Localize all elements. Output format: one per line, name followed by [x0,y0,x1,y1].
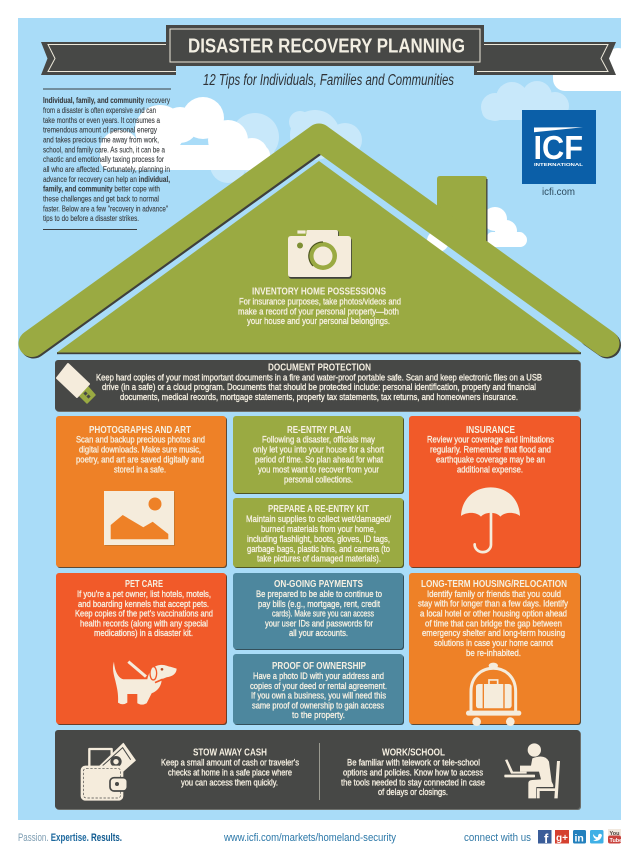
intro text: from a disaster is often expensive and can [43,105,156,115]
panel: pet care: If you're a pet owner, list hotels, motels, [77,589,211,599]
title banner [41,25,616,75]
panel: prepare a re-entry kit: PREPARE A RE-ENTRY KIT [268,504,369,515]
intro text [43,88,171,230]
panel: pet care: PET CARE [125,579,163,590]
title: DISASTER RECOVERY PLANNING [188,36,465,58]
clouds [100,48,633,252]
panel: document protection [55,360,581,412]
roof [32,137,608,345]
panel: re-entry plan: you most want to recover from your [258,464,379,474]
panel: re-entry plan: period of time. So plan ahead for what [255,454,383,464]
panel: pet care: Keep copies of the pet's vaccinations and [75,609,213,619]
ICF logo [522,110,596,198]
icon: luggage cart [466,663,521,726]
intro text: Individual, family, and community recovery [43,95,171,105]
panel: on-going payments: your user IDs and passwords for [265,618,373,628]
panel: prepare a re-entry kit [233,498,404,568]
panel: on-going payments: ON-GOING PAYMENTS [274,579,363,590]
panel: insurance: additional expense. [457,464,523,474]
panel: document protection: drive (in a safe) or a cloud program. Documents that should be protected include: personal identification, property and financial [102,382,536,392]
intro text: and takes precious time away from work, [43,134,159,144]
intro text: advance for recovery can help an individual, [43,174,170,184]
panel: insurance: INSURANCE [466,425,515,436]
panel: photographs and art [56,416,227,568]
icon: person at laptop [504,743,560,798]
tagline: Passion. Expertise. Results. [18,832,122,844]
icon: twitter [590,830,604,844]
stow away cash text: Keep a small amount of cash or traveler's [161,758,300,768]
panel: pet care [56,573,227,725]
panel: proof of ownership: copies of your deed or rental agreement. [250,681,387,691]
panel: photographs and art: Scan and backup precious photos and [76,435,205,445]
panel: long-term housing: stay with for longer than a few days. Identify [418,599,569,609]
panel: re-entry plan: Following a disaster, officials may [262,435,376,445]
panel: prepare a re-entry kit: Maintain supplies to collect wet/damaged/ [246,514,391,524]
work/school text [341,748,485,797]
panel: inventory home possessions: make a record of your personal property—both [238,306,399,316]
panel: insurance [409,416,581,568]
icon: camera [288,230,352,279]
panel: on-going payments: pay bills (e.g., mortgage, rent, credit [258,599,380,609]
panel: insurance: regularly. Remember that flood and [430,444,551,454]
intro text: family, and community better cope with [43,184,160,194]
ICF logo: INTERNATIONAL [534,162,583,167]
intro text: school, and family care. As such, it can be a [43,144,165,154]
ICF logo: icfi.com [542,187,575,198]
panel: document protection: Keep hard copies of your most important documents in a fire and water-proof portable safe. Scan and keep electronic files on a USB [96,372,542,382]
panel: prepare a re-entry kit: take pictures of damaged materials). [257,554,381,564]
footer [18,829,622,846]
subtitle: 12 Tips for Individuals, Families and Communities [203,72,454,89]
panel: long-term housing: of time that can bridge the gap between [425,618,562,628]
intro text: all who are affected. Fortunately, planning in [43,164,170,174]
panel: prepare a re-entry kit: garbage bags, plastic bins, and camera (to [247,544,390,554]
panel: proof of ownership: same proof of ownership to gain access [252,700,385,710]
panel: long-term housing: Identify family or friends that you could [427,589,561,599]
icon: facebook [538,830,552,846]
panel: insurance: earthquake coverage may be an [436,454,545,464]
work/school text: WORK/SCHOOL [382,748,445,758]
panel: inventory home possessions [238,230,401,326]
panel: long-term housing: LONG-TERM HOUSING/RELOCATION [421,579,567,590]
work/school text: the tools needed to stay connected in case [341,778,485,788]
panel: proof of ownership: If you own a business, you will need this [251,691,387,701]
panel: on-going payments: cards). Make sure you can access [272,609,374,619]
panel: proof of ownership: Have a photo ID with your address and [253,671,384,681]
icon: dog [113,662,177,705]
intro text: tremendous amount of personal energy [43,125,158,135]
intro text: tips to do before a disaster strikes. [43,213,139,223]
panel: prepare a re-entry kit: including flashlight, boots, gloves, ID tags, [247,534,390,544]
panel: on-going payments: Be prepared to be able to continue to [256,589,382,599]
icon: picture [104,491,175,546]
intro text: these challenges and get back to normal [43,194,159,204]
panel: long-term housing: solutions in case your home cannot [434,638,553,648]
panel: photographs and art: PHOTOGRAPHS AND ART [89,425,191,436]
panel: inventory home possessions: your house and your personal belongings. [247,316,390,326]
house body [57,161,581,354]
panel: inventory home possessions: For insurance purposes, take photos/videos and [239,296,401,306]
website url: www.icfi.com/markets/homeland-security [223,832,396,844]
icon: usb drive [57,364,95,403]
panel: photographs and art: stored in a safe. [114,464,166,474]
panel: long-term housing: be re-inhabited. [466,648,521,658]
panel: photographs and art: poetry, and art are saved digitally and [76,454,204,464]
panel: document protection: documents, medical records, mortgage statements, property tax statements, tax returns, and homeowners insurance. [120,392,518,402]
icon: google plus: g+ [556,833,568,844]
panel: pet care: health records (along with any special [80,618,208,628]
icon: wallet [81,743,135,801]
stow away cash text: STOW AWAY CASH [193,748,267,758]
panel: long-term housing [409,573,581,726]
stow away cash text: checks at home in a safe place where [168,768,292,778]
intro text: take months or even years. It consumes a [43,115,160,125]
work/school text: of delays or closings. [378,787,448,797]
intro text: faster. Below are a few "recovery in advance" [43,203,168,213]
panel: inventory home possessions: INVENTORY HOME POSSESSIONS [252,286,386,298]
chimney [437,176,488,258]
main banner [166,25,484,66]
stow away cash text: you can access them quickly. [181,778,278,788]
panel: insurance: Review your coverage and limitations [427,435,555,445]
icon: umbrella [461,487,520,552]
panel: on-going payments: all your accounts. [289,628,348,638]
ICF logo: ICF [534,129,583,166]
panel: photographs and art: digital downloads. Make sure music, [79,444,201,454]
panel: proof of ownership [233,654,404,725]
intro text: chaotic and emotionally taxing process for [43,154,164,164]
panel: on-going payments [233,573,404,650]
panel: re-entry plan: RE-ENTRY PLAN [287,425,351,436]
icon: linkedin [573,830,586,844]
ribbon right [474,42,616,75]
panel: proof of ownership: to the property. [292,710,345,720]
panel: pet care: and boarding kennels that accept pets. [78,599,209,609]
ribbon left [41,42,176,75]
panel: pet care: medications) in a disaster kit. [94,628,193,638]
icon: youtube [608,829,622,844]
house [32,137,608,354]
icon: youtube: You [610,831,619,837]
icon: linkedin: in [574,832,584,844]
icon: google plus [555,830,569,844]
panel: re-entry plan: personal collections. [284,474,353,484]
panel: re-entry plan [233,416,404,494]
panel: prepare a re-entry kit: burned materials from your home, [261,524,376,534]
panel: document protection: DOCUMENT PROTECTION [268,362,371,374]
panel: bottom dark band [55,730,581,810]
panel: long-term housing: a local hotel or other housing option ahead [420,608,567,618]
connect with us: connect with us [464,832,531,844]
panel: re-entry plan: only let you into your house for a short [253,444,384,454]
work/school text: Be familiar with telework or tele-school [347,758,480,768]
panel: long-term housing: emergency shelter and long-term housing [422,628,565,638]
icon: youtube: Tube [610,838,622,844]
work/school text: options and policies. Know how to access [343,768,484,778]
panel: proof of ownership: PROOF OF OWNERSHIP [272,661,366,672]
icon: facebook: f [544,831,549,846]
stow away cash text [161,748,300,788]
